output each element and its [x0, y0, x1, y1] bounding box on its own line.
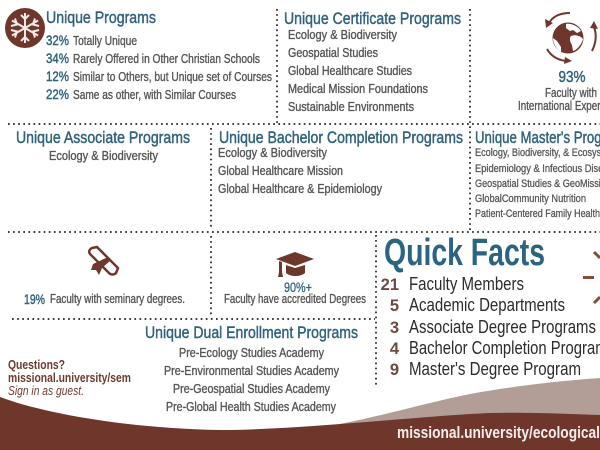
panel: unique dual enrollment programs: Pre-Environmental Studies Academy: [164, 364, 340, 378]
panel: quick facts: 21: [381, 276, 399, 294]
panel: international experience: 93%: [558, 69, 586, 86]
stat rows: 34%: [46, 50, 69, 66]
stat rows: 22%: [46, 86, 69, 102]
panel: quick facts: 9: [390, 361, 399, 379]
panel: quick facts: 4: [390, 340, 400, 358]
panel: unique bachelor completion programs: Ecology & Biodiversity: [218, 146, 328, 160]
panel: unique associate programs: [16, 128, 190, 163]
panel: quick facts: 5: [390, 297, 399, 315]
stat rows: [46, 32, 272, 102]
panel: quick facts: [381, 232, 600, 379]
icon: diploma: [89, 247, 118, 275]
heading: Unique Programs: [46, 8, 156, 27]
panel: unique certificate programs: Sustainable Environments: [288, 100, 414, 114]
panel: seminary degrees: 19%: [24, 291, 45, 307]
panel: unique certificate programs: Unique Certificate Programs: [284, 9, 461, 28]
stat rows: Totally Unique: [73, 34, 137, 48]
panel: unique programs: [5, 8, 272, 102]
panel: unique certificate programs: Medical Mission Foundations: [288, 82, 428, 96]
panel: unique bachelor completion programs: Global Healthcare Mission: [218, 164, 343, 178]
panel: quick facts: Quick Facts: [384, 232, 545, 274]
panel: unique dual enrollment programs: Pre-Geospatial Studies Academy: [173, 382, 331, 396]
panel: accredited degrees: [224, 252, 366, 306]
stat rows: Similar to Others, but Unique set of Courses: [73, 70, 272, 84]
panel: seminary degrees: [24, 247, 185, 307]
stat rows: 32%: [46, 32, 69, 48]
panel: international experience: [518, 13, 600, 113]
panel: unique certificate programs: [284, 9, 461, 114]
panel: unique bachelor completion programs: [218, 128, 463, 196]
panel: quick facts: 3: [390, 319, 399, 337]
panel: unique dual enrollment programs: Pre-Global Health Studies Academy: [166, 400, 337, 414]
panel: unique dual enrollment programs: Unique Dual Enrollment Programs: [145, 323, 358, 342]
questions note: Questions?: [8, 358, 65, 372]
panel: seminary degrees: Faculty with seminary degrees.: [50, 292, 185, 306]
questions note: [8, 358, 131, 398]
panel: accredited degrees: Faculty have accredited Degrees: [224, 292, 366, 306]
icon: graduation cap: [276, 252, 314, 277]
panel: unique certificate programs: Ecology & Biodiversity: [288, 28, 398, 42]
stat rows: Rarely Offered in Other Christian Schools: [73, 52, 260, 66]
panel: unique bachelor completion programs: Unique Bachelor Completion Programs: [219, 128, 463, 147]
panel: accredited degrees: 90%+: [284, 279, 312, 295]
panel: unique associate programs: Ecology & Biodiversity: [49, 149, 159, 163]
questions note: Sign in as guest.: [8, 384, 84, 398]
panel: unique master's programs: [475, 128, 600, 220]
stat rows: Same as other, with Similar Courses: [73, 88, 236, 102]
panel: unique certificate programs: Global Healthcare Studies: [288, 64, 412, 78]
panel: unique bachelor completion programs: Global Healthcare & Epidemiology: [218, 182, 383, 196]
icon: globe with arrows: [545, 13, 598, 64]
panel: quick facts: Academic Departments: [409, 294, 565, 315]
footer wave: light: [340, 378, 600, 425]
icon: sunburst: [583, 252, 600, 303]
panel: unique associate programs: Unique Associate Programs: [16, 128, 190, 147]
stat rows: 12%: [46, 68, 69, 84]
panel: quick facts: Faculty Members: [409, 273, 524, 294]
footer wave: dark: [0, 397, 600, 450]
panel: unique dual enrollment programs: [145, 323, 358, 414]
panel: unique dual enrollment programs: Pre-Ecology Studies Academy: [179, 346, 325, 360]
icon: snowflake: [5, 8, 45, 48]
panel: unique certificate programs: Geospatial Studies: [288, 46, 378, 60]
questions note: missional.university/sem: [8, 371, 131, 385]
